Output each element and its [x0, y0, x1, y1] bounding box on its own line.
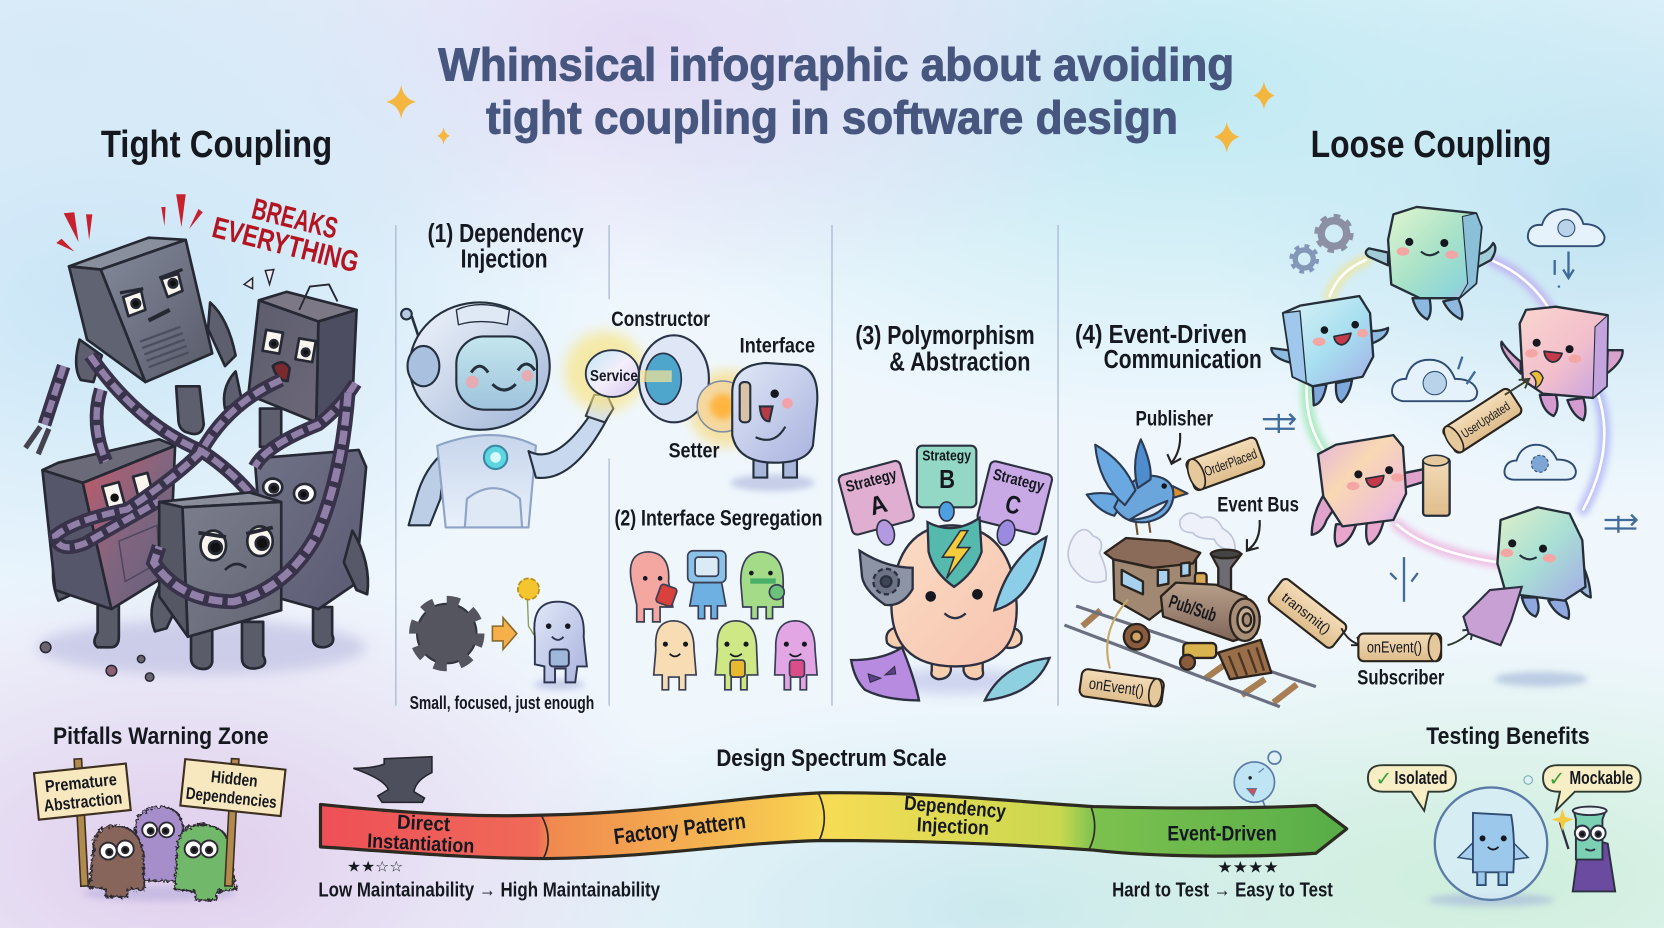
strategy B puzzle: B — [939, 466, 955, 494]
star ratings — [347, 857, 1279, 876]
panel: tight coupling illustration — [25, 184, 369, 681]
sign: hidden dependencies: Hidden — [210, 767, 259, 791]
spectrum labels: Direct — [396, 812, 451, 836]
spectrum labels: Injection — [916, 814, 990, 840]
heading: tight coupling: Tight Coupling — [101, 123, 332, 166]
panel: pitfalls warning zone — [34, 723, 286, 901]
heading: event-driven: (4) Event-Driven — [1075, 321, 1247, 349]
arrow icon — [492, 618, 517, 649]
arrow: publisher pointer — [1167, 433, 1181, 464]
strategy C puzzle: Strategy — [991, 466, 1046, 495]
strategy A puzzle — [838, 460, 920, 553]
spectrum labels: Event-Driven — [1167, 822, 1277, 845]
callout: mockable: Mockable — [1570, 768, 1633, 788]
callout: mockable — [1543, 765, 1641, 811]
heading: interface segregation: (2) Interface Segregation — [614, 505, 822, 530]
cube: left blue — [1271, 296, 1388, 405]
chains: back strands — [25, 356, 356, 547]
faces — [643, 571, 807, 656]
labels: constructor, interface, setter: Interface — [740, 334, 815, 357]
sign: premature abstraction — [34, 759, 131, 886]
panel: dependency injection — [401, 220, 817, 527]
breaks everything label: BREAKS — [249, 193, 341, 246]
focused character with flower — [518, 578, 587, 690]
bird: publisher — [1087, 439, 1188, 535]
sign: hidden dependencies: Dependencies — [185, 784, 278, 812]
scroll: publisher onEvent: onEvent() — [1088, 676, 1145, 700]
gear icon — [414, 601, 480, 666]
scroll: user updated: UserUpdated — [1458, 398, 1513, 441]
icon: anvil — [353, 757, 432, 802]
bubble with isolated cube — [1427, 776, 1555, 906]
box: worried back right — [255, 450, 368, 647]
label: service: Service — [590, 368, 638, 385]
panel: polymorphism and abstraction — [838, 322, 1053, 700]
box: grumpy front centre — [152, 492, 281, 669]
train: pub/sub — [1105, 538, 1271, 679]
labels: constructor, interface, setter: Constructor — [611, 308, 710, 331]
package — [1463, 587, 1522, 645]
scroll: user updated — [1440, 387, 1523, 455]
small signal arrows — [1263, 252, 1636, 602]
title: Whimsical infographic about avoiding — [438, 39, 1234, 91]
heading: polymorphism — [855, 322, 1035, 376]
scroll: order placed — [1184, 436, 1266, 492]
cube: lower left peach — [1312, 435, 1450, 547]
heading: dependency injection: Injection — [461, 245, 548, 273]
heading: event-driven — [1075, 321, 1262, 374]
axis labels: Hard to Test → Easy to Test — [1112, 880, 1333, 902]
heading: testing benefits: Testing Benefits — [1426, 723, 1590, 750]
strategy C puzzle — [972, 460, 1053, 553]
callout: isolated: Isolated — [1394, 768, 1448, 788]
cube: top green — [1366, 207, 1495, 319]
heading: polymorphism: & Abstraction — [889, 348, 1030, 376]
scroll: subscriber onEvent — [1358, 634, 1441, 661]
spectrum labels — [367, 793, 1277, 858]
cloud: lower — [1504, 445, 1576, 480]
mask and feather — [851, 647, 1050, 700]
label: event bus: Event Bus — [1217, 494, 1299, 517]
title — [438, 39, 1234, 144]
panel: design spectrum scale — [318, 745, 1347, 902]
axis labels — [318, 880, 1333, 902]
scroll: publisher onEvent — [1079, 668, 1165, 707]
debris — [40, 270, 274, 681]
strategy B puzzle — [917, 446, 976, 521]
scroll: subscriber onEvent: onEvent() — [1367, 640, 1422, 657]
heading: dependency injection: (1) Dependency — [428, 220, 584, 248]
shape-shifting character — [860, 518, 1046, 694]
glow and injection orbs — [565, 331, 765, 447]
cube: lower right mint — [1497, 507, 1591, 619]
panel: testing benefits — [1368, 723, 1641, 906]
callout: isolated — [1368, 765, 1456, 811]
labels: constructor, interface, setter: Setter — [669, 439, 720, 462]
strategy B puzzle: Strategy — [922, 449, 972, 465]
label: pub/sub: Pub/Sub — [1166, 592, 1219, 627]
interface character — [730, 363, 817, 491]
cube: right pink — [1501, 307, 1623, 420]
breaks everything label — [209, 184, 369, 279]
callout: isolated: ✓ — [1375, 766, 1392, 790]
cloud: top — [1528, 209, 1605, 246]
heading: loose coupling: Loose Coupling — [1311, 123, 1552, 166]
rainbow connection arcs — [1307, 260, 1604, 562]
steam — [1068, 513, 1235, 582]
strategy A puzzle: A — [867, 490, 890, 521]
title: tight coupling in software design — [486, 92, 1178, 144]
icon: bubble character — [1234, 751, 1281, 817]
label: publisher: Publisher — [1136, 408, 1213, 431]
axis labels: Low Maintainability → High Maintainability — [318, 880, 661, 902]
caption: Small, focused, just enough — [410, 693, 594, 713]
box: cracked right — [224, 284, 357, 447]
box: red tinted back left — [42, 439, 175, 647]
robot — [401, 302, 613, 527]
red alarm marks — [56, 194, 203, 252]
box: angry server top left — [69, 238, 236, 434]
ground shadow — [37, 620, 366, 675]
arrow: event bus pointer — [1247, 520, 1260, 551]
heading: dependency injection — [428, 220, 584, 273]
callback wire — [1107, 600, 1128, 669]
scroll: order placed: OrderPlaced — [1202, 446, 1259, 479]
panel: event driven communication — [1064, 321, 1473, 707]
heading: polymorphism: (3) Polymorphism — [855, 322, 1035, 350]
six small interface characters — [630, 551, 817, 690]
gears — [1292, 216, 1351, 272]
sign: premature abstraction: Premature — [44, 770, 118, 796]
chains: front strands — [154, 393, 348, 602]
breaks everything label: EVERYTHING — [209, 211, 362, 279]
callout: mockable: ✓ — [1548, 766, 1565, 790]
label: subscriber: Subscriber — [1357, 666, 1444, 689]
panel: interface segregation — [614, 505, 822, 690]
arrow: to subscriber — [1341, 628, 1359, 645]
monsters — [83, 807, 236, 901]
strategy C puzzle: C — [1002, 490, 1023, 521]
labels: constructor, interface, setter — [611, 308, 815, 462]
sign: hidden dependencies — [180, 759, 286, 886]
spectrum ribbon — [320, 793, 1347, 859]
scroll: transmit — [1267, 577, 1348, 650]
sign: premature abstraction: Abstraction — [43, 788, 123, 816]
wizard test tube — [1552, 807, 1615, 891]
rails — [1064, 606, 1316, 707]
heading: pitfalls: Pitfalls Warning Zone — [53, 723, 268, 750]
panel: loose coupling illustration — [1263, 207, 1636, 687]
spectrum labels: Instantiation — [367, 830, 475, 858]
heading: spectrum: Design Spectrum Scale — [716, 745, 947, 772]
spectrum labels: Dependency — [903, 793, 1007, 823]
star ratings: ★★☆☆ — [347, 857, 403, 875]
star ratings: ★★★★ — [1217, 857, 1279, 876]
arrow: scroll to cube — [1505, 379, 1529, 395]
arrow: to data packet — [1448, 629, 1473, 645]
heading: event-driven: Communication — [1104, 346, 1262, 374]
decorative sparkles — [386, 82, 1275, 153]
cloud: middle — [1392, 360, 1477, 401]
scroll: transmit: transmit() — [1279, 590, 1333, 637]
strategy A puzzle: Strategy — [844, 466, 899, 496]
panel: small gear to focused character — [410, 578, 594, 713]
shadow under mint cube — [1494, 672, 1588, 687]
spectrum labels: Factory Pattern — [612, 808, 747, 849]
panel dividers — [396, 225, 1058, 706]
